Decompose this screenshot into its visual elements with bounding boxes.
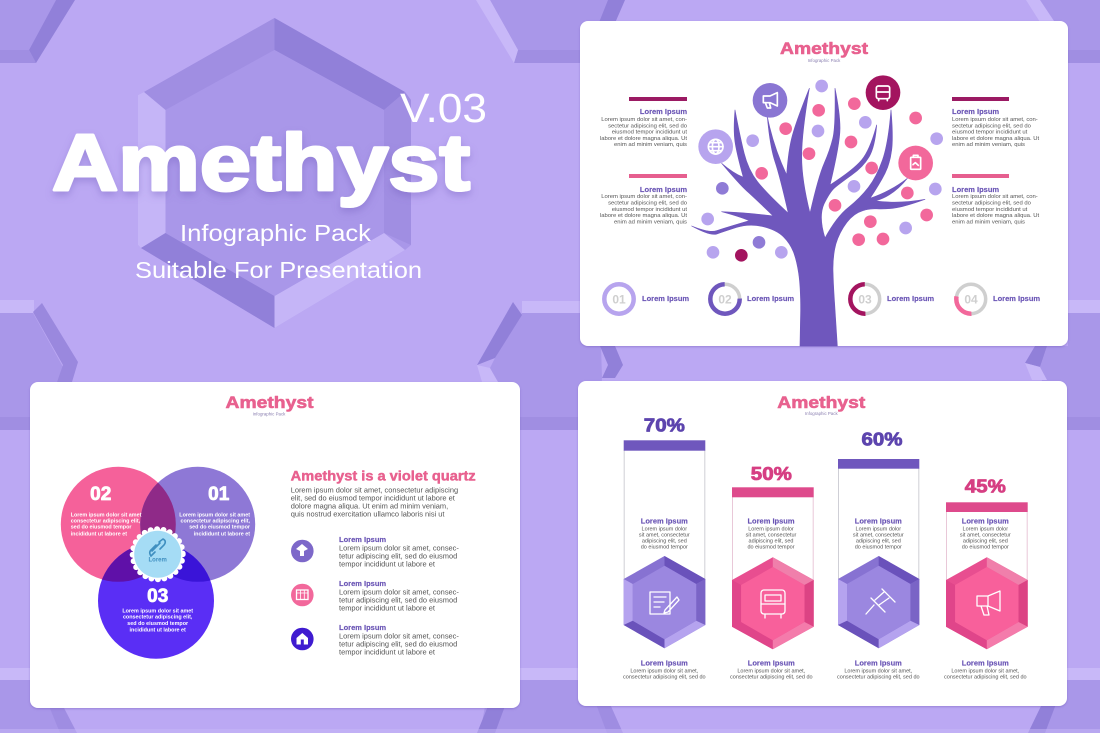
icon: clipboard: [898, 146, 933, 180]
label 03: 03: [147, 586, 168, 607]
icon: document: [650, 592, 679, 614]
text block: top right: sectetur adipiscing elit, sed do: [952, 124, 1032, 130]
text block: lower right: labore et dolore magna aliqua. Ut: [952, 213, 1039, 219]
bar: lower right: [952, 174, 1009, 178]
column 3: adipiscing elit, sed: [856, 539, 901, 545]
text 02: Lorem ipsum dolor sit amet: [71, 513, 142, 519]
legend 01: 01: [612, 292, 626, 306]
text block: top right: Lorem Ipsum: [952, 107, 999, 116]
text block: top left: enim ad minim veniam, quis: [614, 142, 687, 148]
text block: top left: Lorem Ipsum: [640, 107, 687, 116]
text block: top right: Lorem ipsum dolor sit amet, con-: [952, 117, 1038, 123]
venn paragraph: [291, 486, 458, 519]
list item 2: [291, 579, 459, 612]
column 2: Lorem Ipsum: [748, 659, 795, 668]
icon: megaphone: [977, 591, 1000, 615]
text block: top left: labore et dolore magna aliqua. Ut: [600, 136, 687, 142]
hero title: Amethyst: [52, 118, 470, 207]
text block: top right: labore et dolore magna aliqua. Ut: [952, 136, 1039, 142]
text 02: sed do eiusmod tempor: [71, 525, 132, 531]
text block: lower left: [600, 185, 688, 226]
venn panel title: Amethyst: [226, 393, 314, 412]
text block: lower left: sectetur adipiscing elit, sed do: [608, 200, 688, 206]
panel: tree: [580, 21, 1068, 346]
column 1: sit amet, consectetur: [639, 532, 690, 538]
column 1: do eiusmod tempor: [641, 544, 688, 550]
column 3: sit amet, consectetur: [853, 532, 904, 538]
bar: top left: [629, 97, 687, 101]
column 3: Lorem ipsum dolor: [856, 526, 901, 532]
column 3: consectetur adipiscing elit, sed do: [837, 675, 920, 681]
icon: megaphone: [753, 83, 787, 118]
text block: lower right: [952, 185, 1039, 226]
bar: lower left: [629, 174, 687, 178]
text block: top left: [600, 107, 688, 148]
venn diagram: [61, 467, 255, 659]
text 03: [122, 609, 193, 633]
column 2: 50%: [751, 464, 792, 484]
column 4: [944, 477, 1028, 681]
text block: lower right: eiusmod tempor incididunt ut: [952, 207, 1028, 213]
hexagon 4: [946, 557, 1028, 649]
column 3: Lorem ipsum dolor sit amet,: [844, 669, 913, 675]
bar: top right: [952, 97, 1009, 101]
column 1: Lorem ipsum dolor: [642, 526, 687, 532]
text block: top left: eiusmod tempor incididunt ut: [612, 130, 687, 136]
legend 01: [604, 284, 689, 314]
column 2: Lorem ipsum dolor: [748, 526, 794, 532]
column 1: 70%: [644, 416, 685, 436]
text block: top right: enim ad minim veniam, quis: [952, 142, 1025, 148]
list item 3: Lorem Ipsum: [339, 623, 386, 632]
column 4: consectetur adipiscing elit, sed do: [944, 675, 1027, 681]
version label: V.03: [400, 85, 487, 131]
column 1: Lorem ipsum dolor sit amet,: [630, 669, 699, 675]
text block: top right: [952, 107, 1039, 148]
legend 01: Lorem Ipsum: [642, 294, 689, 303]
column 1: Lorem Ipsum: [641, 516, 688, 525]
venn paragraph: Lorem ipsum dolor sit amet, consectetur adipiscing: [291, 486, 458, 495]
panel: venn: [30, 382, 520, 708]
text 01: incididunt ut labore et: [194, 531, 250, 537]
column 4: Lorem Ipsum: [962, 516, 1009, 525]
text 02: incididunt ut labore et: [71, 531, 127, 537]
hero subtitle line 1: Infographic Pack: [180, 220, 371, 246]
list item 1: Lorem ipsum dolor sit amet, consec-: [339, 543, 459, 552]
list item 2: tetur adipiscing elit, sed do eiusmod: [339, 595, 457, 604]
hexagon 2: [732, 557, 814, 649]
legend 03: [850, 284, 934, 314]
hexagon 1: [624, 556, 705, 648]
column 3: [837, 429, 920, 681]
center badge: [133, 529, 183, 579]
center badge: Lorem: [149, 558, 167, 564]
text block: top left: sectetur adipiscing elit, sed do: [608, 124, 688, 130]
list item 3: tempor incididunt ut labore et: [339, 648, 436, 657]
column 2: consectetur adipiscing elit, sed do: [730, 675, 813, 681]
label 02: 02: [90, 484, 111, 505]
column 2: do eiusmod tempor: [747, 544, 795, 550]
icon: pushpin: [866, 589, 895, 614]
column 2: Lorem Ipsum: [747, 516, 795, 525]
label 01: 01: [208, 484, 230, 505]
venn paragraph: elit, sed do eiusmod tempor incididunt ut labore et: [291, 494, 456, 503]
legend 03: Lorem Ipsum: [887, 294, 934, 303]
legend 02: 02: [718, 292, 732, 306]
text block: top left: Lorem ipsum dolor sit amet, con-: [601, 117, 687, 123]
text 01: [179, 513, 251, 537]
text 02: [71, 513, 142, 537]
column 1: Lorem Ipsum: [641, 659, 688, 668]
hero subtitle line 2: Suitable For Presentation: [135, 257, 422, 283]
column 2: adipiscing elit, sed: [749, 539, 793, 545]
list item 2: Lorem Ipsum: [339, 579, 386, 588]
text 03: incididunt ut labore et: [130, 627, 186, 633]
list item 3: tetur adipiscing elit, sed do eiusmod: [339, 640, 457, 649]
panel: hexagon bars: [578, 381, 1067, 706]
venn heading: Amethyst is a violet quartz: [291, 468, 476, 484]
legend 03: 03: [858, 292, 872, 306]
list item 2: tempor incididunt ut labore et: [339, 603, 436, 612]
text 03: Lorem ipsum dolor sit amet: [122, 609, 193, 615]
column 4: adipiscing elit, sed: [963, 539, 1008, 545]
column 4: sit amet, consectetur: [960, 532, 1011, 538]
text block: top right: eiusmod tempor incididunt ut: [952, 130, 1028, 136]
text 03: consectetur adipiscing elit,: [123, 615, 193, 621]
list item 2: Lorem ipsum dolor sit amet, consec-: [339, 587, 459, 596]
legend 02: [710, 284, 794, 314]
venn paragraph: quis nostrud exercitation ullamco laboris nisi ut: [291, 510, 445, 519]
column 1: [623, 416, 706, 681]
tree panel title: Amethyst: [780, 39, 868, 58]
column 2: Lorem ipsum dolor sit amet,: [737, 669, 806, 675]
bars panel title: Amethyst: [777, 393, 866, 412]
legend 04: Lorem Ipsum: [993, 294, 1040, 303]
text block: lower left: eiusmod tempor incididunt ut: [612, 207, 687, 213]
legend 04: [956, 284, 1040, 314]
hero hexagon: [138, 18, 411, 328]
column 3: Lorem Ipsum: [855, 516, 902, 525]
text 02: consectetur adipiscing elit,: [71, 519, 141, 525]
list item 1: [291, 535, 459, 568]
column 2: [730, 464, 814, 681]
list item 3: [291, 623, 459, 657]
bars panel subtitle: Infographic Pack: [805, 411, 838, 416]
column 3: do eiusmod tempor: [855, 544, 902, 550]
text 03: sed do eiusmod tempor: [127, 621, 189, 627]
column 4: Lorem ipsum dolor: [963, 526, 1008, 532]
tree: [692, 88, 925, 346]
column 1: adipiscing elit, sed: [642, 539, 687, 545]
icon: globe: [698, 129, 733, 164]
legend 04: 04: [964, 292, 978, 306]
list item 3: Lorem ipsum dolor sit amet, consec-: [339, 631, 459, 640]
text block: lower left: labore et dolore magna aliqua. Ut: [600, 213, 687, 219]
legend 02: Lorem Ipsum: [747, 294, 794, 303]
list item 1: tetur adipiscing elit, sed do eiusmod: [339, 551, 457, 560]
text 01: consectetur adipiscing elit,: [180, 519, 250, 525]
text block: lower left: Lorem Ipsum: [640, 185, 687, 194]
tree panel subtitle: Infographic Pack: [808, 58, 841, 63]
column 4: Lorem Ipsum: [962, 659, 1009, 668]
column 3: Lorem Ipsum: [855, 659, 902, 668]
column 2: sit amet, consectetur: [746, 532, 797, 538]
hexagon 3: [838, 556, 919, 648]
venn panel subtitle: Infographic Pack: [253, 412, 286, 417]
list item 1: Lorem Ipsum: [339, 535, 386, 544]
column 1: consectetur adipiscing elit, sed do: [623, 675, 706, 681]
icon: truck: [866, 75, 900, 110]
list item 1: tempor incididunt ut labore et: [339, 559, 436, 568]
icon: truck: [761, 590, 785, 618]
column 4: 45%: [965, 477, 1006, 497]
text block: lower right: sectetur adipiscing elit, sed do: [952, 200, 1032, 206]
column 4: Lorem ipsum dolor sit amet,: [951, 669, 1020, 675]
text block: lower left: enim ad minim veniam, quis: [614, 220, 687, 226]
text block: lower right: enim ad minim veniam, quis: [952, 220, 1025, 226]
text block: lower left: Lorem ipsum dolor sit amet, con-: [601, 194, 687, 200]
text 01: Lorem ipsum dolor sit amet: [179, 513, 250, 519]
text 01: sed do eiusmod tempor: [189, 525, 251, 531]
tree dots: [701, 80, 943, 262]
text block: lower right: Lorem ipsum dolor sit amet, con-: [952, 194, 1038, 200]
column 3: 60%: [862, 429, 902, 449]
text block: lower right: Lorem Ipsum: [952, 185, 999, 194]
venn paragraph: dolore magna aliqua. Ut enim ad minim veniam,: [291, 502, 448, 511]
column 4: do eiusmod tempor: [962, 544, 1009, 550]
